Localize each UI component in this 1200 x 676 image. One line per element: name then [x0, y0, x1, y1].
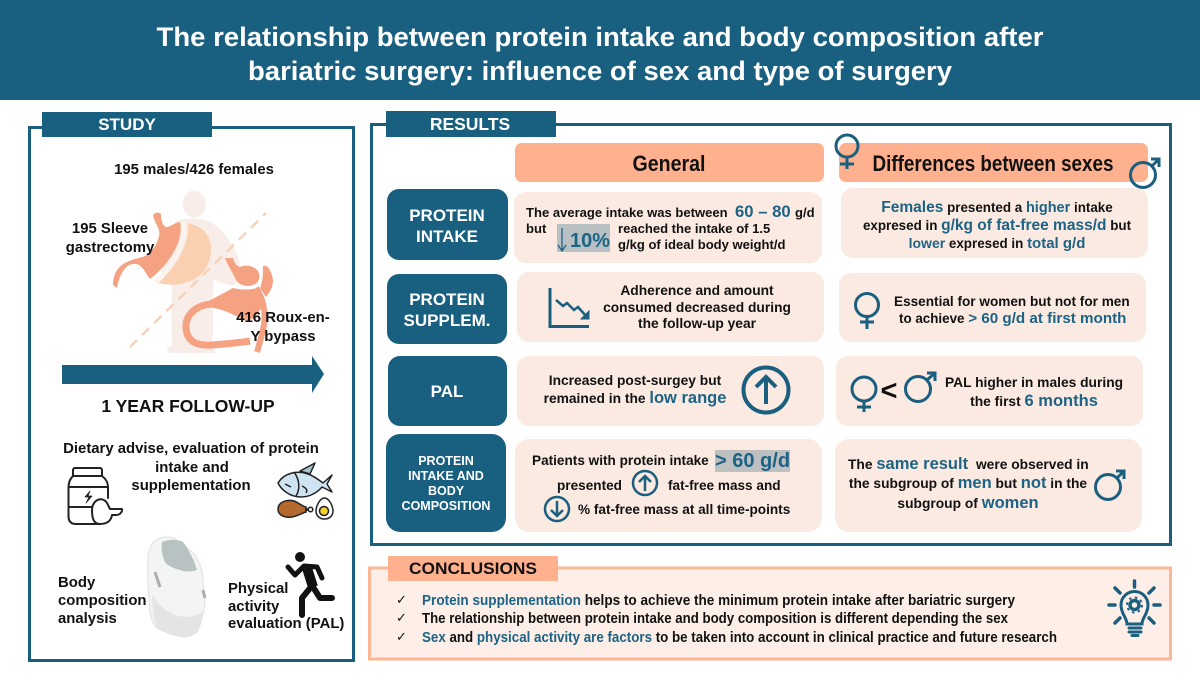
- highlight: over 60 g/d: > 60 g/d: [715, 450, 790, 472]
- icon: female symbol: [836, 135, 858, 169]
- roux-en-y bypass label: 416 Roux-en-: [236, 310, 330, 326]
- difference: protein intake and body composition: the subgroup of men but not in the: [849, 474, 1087, 492]
- panel: conclusions: [370, 556, 1170, 659]
- icon: down arrow circle: [545, 497, 569, 521]
- results tab heading: [386, 111, 556, 137]
- surgery illustration: [113, 190, 273, 353]
- icon: male symbol: [906, 373, 935, 402]
- general: protein intake: reached the intake of 1.5: [618, 221, 770, 236]
- icon: up arrow circle: [744, 368, 788, 412]
- icon: light bulb with gear: [1109, 581, 1160, 636]
- header banner with title: bariatric surgery: influence of sex and type of surgery: [248, 56, 952, 86]
- sleeve gastrectomy label: 195 Sleeve: [72, 221, 148, 237]
- roux-en-y bypass label: [236, 310, 330, 345]
- general: protein intake and body composition: fat-free mass and: [668, 478, 781, 493]
- row label: protein supplementation: PROTEIN: [409, 290, 485, 309]
- results tab heading: RESULTS: [430, 114, 510, 134]
- study tab heading: [42, 112, 212, 137]
- row label: protein intake and body composition: COMPOSITION: [402, 499, 490, 513]
- dietary advice text: Dietary advise, evaluation of protein: [63, 441, 319, 457]
- header banner with title: The relationship between protein intake and body composition after: [156, 22, 1044, 52]
- general: PAL: remained in the low range: [544, 389, 726, 407]
- difference: protein supplementation: Essential for women but not for men: [894, 294, 1130, 309]
- general: protein intake: g/kg of ideal body weight/d: [618, 237, 785, 252]
- body composition label: Body: [58, 575, 96, 591]
- row label: protein intake and body composition: INTAKE AND: [408, 469, 484, 483]
- sleeve gastrectomy label: gastrectomy: [66, 240, 155, 256]
- difference: PAL: the first 6 months: [970, 392, 1098, 410]
- body composition label: composition: [58, 593, 147, 609]
- sample size text: 195 males/426 females: [114, 162, 274, 178]
- physical activity label: [228, 581, 344, 632]
- difference: PAL: PAL higher in males during: [945, 375, 1123, 390]
- icon: protein jar and scoop: [68, 468, 122, 524]
- highlight: 10 percent: [557, 224, 610, 252]
- general: protein intake: 60 – 80: [735, 202, 791, 221]
- difference: protein intake: Females presented a higher intake: [881, 199, 1113, 216]
- difference: protein intake: lower expresed in total g/d: [909, 235, 1085, 252]
- column heading: general: General: [632, 151, 706, 176]
- icon: runner: [288, 552, 332, 615]
- column heading: differences between sexes: [836, 135, 1159, 188]
- dietary advice text: [63, 441, 319, 494]
- conclusion 3: Sex and physical activity are factors to be taken into account in clinical practice and future research: [422, 630, 1057, 646]
- physical activity label: evaluation (PAL): [228, 616, 344, 632]
- difference: PAL: [836, 356, 1143, 426]
- conclusion 3: ✓: [396, 629, 407, 644]
- general: protein intake: but: [526, 221, 547, 236]
- highlight: 10 percent: 10%: [570, 230, 610, 252]
- header banner with title: [0, 0, 1200, 100]
- general: protein supplementation: [517, 272, 824, 342]
- row label: PAL: PAL: [431, 382, 463, 401]
- less-than sign: <: [881, 375, 897, 407]
- general: protein supplementation: the follow-up year: [638, 316, 757, 331]
- row label: protein intake and body composition: PROTEIN: [418, 454, 474, 468]
- difference: protein intake and body composition: The same result were observed in: [848, 455, 1089, 473]
- difference: protein supplementation: to achieve > 60 g/d at first month: [899, 310, 1126, 327]
- row label: protein intake: PROTEIN: [409, 206, 485, 225]
- physical activity label: activity: [228, 599, 280, 615]
- difference: protein intake: expresed in g/kg of fat-free mass/d but: [863, 217, 1132, 234]
- icon: boiled egg: [316, 498, 333, 519]
- panel: results: [372, 111, 1170, 544]
- conclusion 1: Protein supplementation helps to achieve the minimum protein intake after bariatric surgery: [422, 593, 1015, 609]
- icon: body composition scanner: [148, 537, 205, 637]
- general: protein intake: g/d: [795, 205, 815, 220]
- difference: protein intake and body composition: subgroup of women: [897, 494, 1039, 512]
- icon: female symbol: [856, 294, 878, 329]
- arrow: follow-up timeline: [62, 356, 324, 393]
- row label: protein intake: [387, 189, 508, 260]
- follow-up label: 1 YEAR FOLLOW-UP: [101, 396, 275, 416]
- general: protein intake and body composition: presented: [557, 478, 622, 493]
- column heading: general: [515, 143, 824, 182]
- general: protein intake and body composition: Patients with protein intake: [532, 453, 709, 468]
- body composition label: analysis: [58, 611, 117, 627]
- general: protein supplementation: consumed decreased during: [603, 300, 791, 315]
- conclusions tab heading: [388, 556, 558, 581]
- conclusion 2: The relationship between protein intake and body composition is different depending the sex: [422, 611, 1008, 627]
- general: protein intake: The average intake was between: [526, 205, 728, 220]
- conclusions tab heading: CONCLUSIONS: [409, 559, 537, 578]
- icon: male symbol: [1096, 471, 1124, 500]
- difference: protein intake: [841, 188, 1148, 258]
- difference: protein supplementation: [839, 273, 1146, 342]
- study tab heading: STUDY: [98, 115, 156, 134]
- general: protein intake: [514, 192, 822, 263]
- row label: protein supplementation: SUPPLEM.: [404, 311, 490, 330]
- icon: declining chart: [550, 288, 589, 326]
- row label: PAL: [388, 356, 507, 426]
- general: PAL: [517, 356, 824, 426]
- sleeve gastrectomy label: [66, 221, 155, 256]
- general: protein intake and body composition: [515, 439, 822, 532]
- conclusion 2: ✓: [396, 610, 407, 625]
- icon: up arrow circle: [633, 471, 657, 495]
- row label: protein intake: INTAKE: [416, 227, 478, 246]
- row label: protein supplementation: [387, 274, 507, 344]
- icon: female symbol: [852, 377, 876, 412]
- general: protein supplementation: Adherence and amount: [620, 283, 774, 298]
- dietary advice text: supplementation: [131, 478, 251, 494]
- column heading: differences between sexes: Differences between sexes: [872, 151, 1114, 176]
- roux-en-y bypass label: Y bypass: [250, 329, 316, 345]
- conclusion 1: ✓: [396, 592, 407, 607]
- row label: protein intake and body composition: [386, 434, 506, 532]
- body composition label: [58, 575, 147, 627]
- general: protein intake and body composition: % fat-free mass at all time-points: [578, 502, 790, 517]
- row label: protein intake and body composition: BODY: [428, 484, 465, 498]
- dietary advice text: intake and: [155, 460, 229, 476]
- icon: male symbol: [1130, 159, 1159, 188]
- icon: fish: [278, 463, 332, 497]
- difference: protein intake and body composition: [835, 439, 1142, 532]
- physical activity label: Physical: [228, 581, 288, 597]
- general: PAL: Increased post-surgey but: [549, 373, 722, 388]
- icon: chicken drumstick: [278, 500, 313, 517]
- panel: study: [30, 112, 354, 660]
